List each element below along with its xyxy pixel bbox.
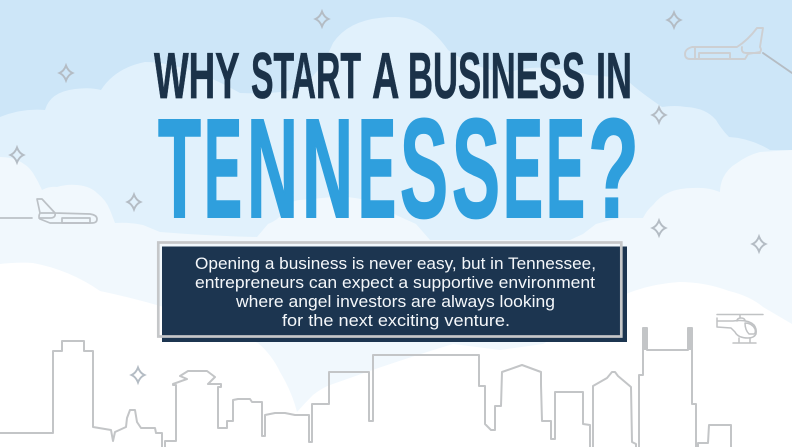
title line: Why start a business in: START: [251, 39, 361, 112]
star icon: [132, 368, 144, 382]
title line: Tennessee: T: [158, 89, 201, 247]
title line: Why start a business in: IN: [596, 39, 632, 112]
star icon: [652, 108, 666, 122]
star icon: [10, 148, 24, 162]
title line: Tennessee: S: [400, 89, 448, 247]
title line: Tennessee: N: [302, 89, 353, 247]
skyline outline: [0, 328, 731, 447]
title line: Tennessee: E: [503, 89, 543, 247]
icon: airplane upper right with trail: [685, 28, 792, 73]
title line: Tennessee: ?: [588, 89, 639, 247]
cloud layer: white foreground hills: [0, 263, 330, 447]
callout dark panel: [162, 246, 627, 342]
star icon: [60, 66, 72, 80]
intro paragraph: where angel investors are always looking: [235, 293, 555, 311]
cloud layer: near clouds: [0, 150, 792, 447]
title line: Tennessee: S: [452, 89, 500, 247]
callout box with intro text: [158, 242, 627, 342]
callout frame: [158, 242, 621, 336]
title line: Why start a business in: WHY: [154, 39, 239, 112]
decorative stars: [10, 12, 766, 382]
title line: Tennessee: E: [546, 89, 585, 247]
star icon: [316, 12, 328, 26]
star icon: [752, 236, 766, 252]
title line: Why start a business in: A: [372, 39, 399, 112]
title line: Why start a business in: BUSINESS: [408, 39, 585, 112]
title line: Tennessee: E: [204, 89, 242, 247]
intro paragraph: entrepreneurs can expect a supportive environment: [195, 274, 595, 292]
star icon: [128, 194, 140, 210]
star icon: [668, 12, 680, 28]
intro paragraph: Opening a business is never easy, but in Tennessee,: [195, 255, 596, 273]
icon: helicopter: [717, 314, 763, 343]
intro paragraph: [195, 255, 596, 330]
title line: Tennessee: N: [247, 89, 298, 247]
intro paragraph: for the next exciting venture.: [282, 312, 510, 330]
title line: Tennessee: E: [358, 89, 396, 247]
cloud layer: white foreground hills right: [280, 282, 792, 447]
star icon: [652, 220, 666, 236]
icon: airplane left with trail: [0, 199, 97, 223]
